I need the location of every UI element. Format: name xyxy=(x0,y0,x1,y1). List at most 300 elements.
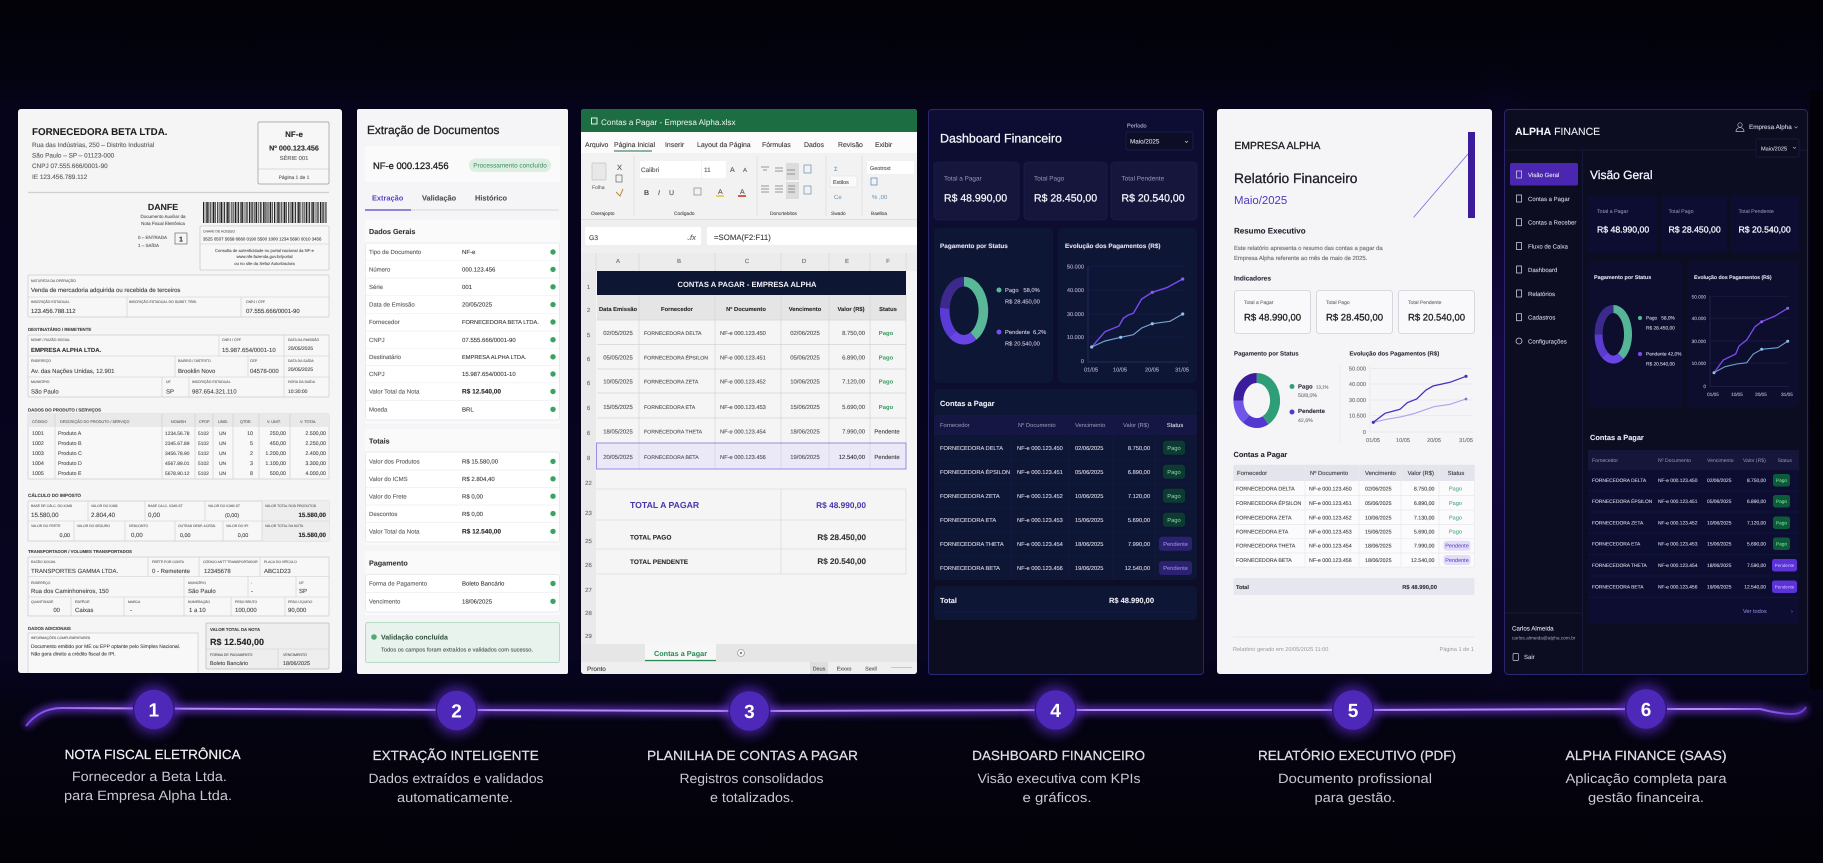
spreadsheet table: Vencimento xyxy=(789,306,822,313)
section: dados gerais: Data de Emissão xyxy=(369,302,415,309)
kpi cards: Total Pago xyxy=(1668,209,1694,215)
step 4 caption: e gráficos. xyxy=(1022,790,1092,805)
tabela de produtos: 2.400,00 xyxy=(305,451,326,457)
panel: planilha de contas a pagar xyxy=(581,109,917,674)
line chart: evolução dos pagamentos: 30.000 xyxy=(1067,312,1084,318)
report table: 18/06/2025 xyxy=(1365,544,1392,550)
section: dados gerais: Fornecedor xyxy=(369,319,400,326)
ribbon: Doncrtebitos xyxy=(770,211,798,217)
resumo executivo: Indicadores xyxy=(1234,276,1271,282)
grid headers: 29 xyxy=(585,633,592,640)
contas a pagar table: Pago xyxy=(1167,518,1181,524)
account menu: Empresa Alpha xyxy=(1749,124,1792,131)
tabela de produtos: Produto C xyxy=(58,451,82,457)
section: totais: Valor do Frete xyxy=(369,493,407,500)
cálculo do imposto xyxy=(28,492,329,541)
ribbon: % ,00 xyxy=(872,194,888,201)
spreadsheet table: 05/06/2025 xyxy=(790,354,820,362)
indicator cards: Total Pendente xyxy=(1408,300,1442,306)
transportador: SP xyxy=(299,588,307,595)
contas a pagar table: saas: FORNECEDORA ZETA xyxy=(1592,520,1644,526)
report table: Pago xyxy=(1449,501,1462,507)
destinatário block: DESTINATÁRIO / REMETENTE xyxy=(28,327,91,332)
report table: 8.750,00 xyxy=(1414,486,1435,492)
spreadsheet totals: TOTAL PAGO xyxy=(630,534,671,542)
spreadsheet table: FORNECEDORA ÉPSILON xyxy=(644,354,708,362)
tabela de produtos: 5678.90.12 xyxy=(165,471,190,477)
destinatário block: 20/05/2025 xyxy=(288,346,313,352)
section: dados gerais: 000.123.456 xyxy=(462,266,496,274)
menu: Dados xyxy=(804,142,824,149)
contas a pagar table: saas: NF-e 000.123.451 xyxy=(1658,499,1698,505)
valor total da nota: R$ 12.540,00 xyxy=(210,637,264,647)
contas a pagar table: Pendente xyxy=(1163,565,1188,572)
panel: extração de documentos xyxy=(357,109,568,674)
kpi cards: Total Pendente xyxy=(1122,176,1165,182)
report total xyxy=(1234,578,1474,595)
report table: Nº Documento xyxy=(1310,470,1349,477)
donut chart: pagamento por status: Pago 58,0% xyxy=(1005,287,1040,294)
kpi cards: R$ 20.540,00 xyxy=(1738,224,1791,234)
natureza da operação block: NATUREZA DA OPERAÇÃO xyxy=(31,278,76,283)
spreadsheet table: 20/05/2025 xyxy=(603,454,633,461)
contas a pagar table: saas: 6.890,00 xyxy=(1747,499,1766,505)
grid headers: E xyxy=(845,258,849,265)
section: totais: R$ 12.540,00 xyxy=(462,529,501,536)
donut chart: saas: Pagamento por Status xyxy=(1594,275,1651,281)
grid headers: 2 xyxy=(587,307,591,314)
report table: Vencimento xyxy=(1365,470,1397,477)
chave de acesso: www.nfe.fazenda.gov.br/portal xyxy=(236,254,293,259)
transportador: UF xyxy=(299,581,304,585)
grid headers: 6 xyxy=(587,405,591,412)
contas a pagar table: FORNECEDORA THETA xyxy=(940,542,1004,548)
tabela de produtos: UNID. xyxy=(218,420,228,424)
contas a pagar table: saas: 15/06/2025 xyxy=(1707,541,1732,547)
menu: Layout da Página xyxy=(697,141,751,149)
contas a pagar table: Pago xyxy=(1167,470,1181,476)
step 3 caption xyxy=(647,748,858,805)
grid headers: 6 xyxy=(587,430,591,437)
cálculo do imposto: BASE DE CÁLC. DO ICMS xyxy=(31,504,73,508)
line chart: report: 01/05 xyxy=(1366,437,1380,444)
spreadsheet table: Pago xyxy=(879,378,894,386)
cálculo do imposto: (0,00) xyxy=(225,513,239,519)
report table: 7.130,00 xyxy=(1414,515,1435,521)
destinatário block: Brooklin Novo xyxy=(178,368,216,375)
valor total da nota: FORMA DE PAGAMENTO xyxy=(210,653,253,657)
spreadsheet table: 8.750,00 xyxy=(842,330,866,337)
tabela de produtos: QTDE. xyxy=(240,420,252,424)
spreadsheet table: 05/05/2025 xyxy=(603,354,633,362)
contas a pagar table: Valor (R$) xyxy=(1123,422,1149,429)
section: totais xyxy=(365,429,560,545)
line chart: saas: 0 xyxy=(1703,384,1706,389)
cálculo do imposto: 0,00 xyxy=(148,512,161,519)
report table: NF-e 000.123.450 xyxy=(1309,486,1352,492)
barcode xyxy=(203,202,327,223)
kpi cards: Total a Pagar xyxy=(1597,209,1628,215)
step 3 caption: Registros consolidados xyxy=(680,771,824,786)
menu: Arquivo xyxy=(585,142,609,149)
tabela de produtos: DESCRIÇÃO DO PRODUTO / SERVIÇO xyxy=(60,419,130,424)
transportador: - xyxy=(251,581,252,585)
contas a pagar table: saas: 05/06/2025 xyxy=(1707,499,1732,505)
cálculo do imposto: DESCONTO xyxy=(129,524,149,528)
ribbon: U xyxy=(669,190,674,197)
destinatário block: EMPRESA ALPHA LTDA. xyxy=(31,347,102,354)
contas a pagar table: saas: 7.120,00 xyxy=(1747,520,1766,526)
contas a pagar table: 5.690,00 xyxy=(1128,518,1150,524)
line chart: report: 20/05 xyxy=(1427,437,1441,444)
grid headers xyxy=(581,253,917,644)
spreadsheet totals: TOTAL PENDENTE xyxy=(630,559,689,566)
step 4 caption xyxy=(972,748,1145,805)
contas a pagar table: FORNECEDORA ETA xyxy=(940,518,996,524)
danfe title: Nota Fiscal Eletrônica xyxy=(141,221,185,226)
total row: R$ 48.990,00 xyxy=(1109,596,1154,605)
section: pagamento: Vencimento xyxy=(369,598,401,606)
ribbon: Ce xyxy=(834,194,842,201)
report table: Pago xyxy=(1449,515,1462,521)
ribbon: B xyxy=(644,190,649,197)
donut chart: report: Pago xyxy=(1298,384,1313,390)
destinatário block xyxy=(28,327,329,397)
step 5 caption xyxy=(1258,748,1456,805)
step 6 caption: Aplicação completa para xyxy=(1566,771,1727,786)
section: dados gerais: Série xyxy=(369,284,384,291)
step 3 marker: 3 xyxy=(744,702,755,723)
step 5 caption: RELATÓRIO EXECUTIVO (PDF) xyxy=(1258,748,1456,763)
spreadsheet table: NF-e 000.123.456 xyxy=(720,455,766,461)
nf-e box xyxy=(258,122,329,184)
section: dados gerais: BRL xyxy=(462,406,474,413)
contas a pagar table: Nº Documento xyxy=(1018,422,1056,429)
report footer: Relatório gerado em 20/05/2025 11:00 xyxy=(1233,646,1328,653)
step 2 caption: automaticamente. xyxy=(397,790,513,805)
step 1 caption: Fornecedor a Beta Ltda. xyxy=(72,769,227,784)
contas a pagar table: 02/06/2025 xyxy=(1075,445,1103,452)
cálculo do imposto: 0,00 xyxy=(180,533,190,539)
section: totais: R$ 15.580,00 xyxy=(462,458,499,466)
report table: Pendente xyxy=(1445,544,1469,550)
transportador: ESPÉCIE xyxy=(75,600,90,604)
natureza da operação block: 123.456.788.112 xyxy=(31,308,76,315)
destinatário block: 10:30:00 xyxy=(288,389,308,395)
contas a pagar table: Status xyxy=(1167,422,1183,429)
dados adicionais: Não gera direito a crédito fiscal de IPI. xyxy=(31,652,116,658)
section: totais: R$ 2.804,40 xyxy=(462,476,495,483)
section: totais: Valor Total da Nota xyxy=(369,529,420,536)
contas a pagar table: FORNECEDORA ZETA xyxy=(940,494,1000,500)
valor total da nota xyxy=(206,623,329,669)
heading: fornecedora: CNPJ 07.555.666/0001-90 xyxy=(32,163,108,170)
report table: 18/06/2025 xyxy=(1365,558,1392,564)
donut chart: report: 50/8,0% xyxy=(1298,393,1317,399)
tabela de produtos: UN xyxy=(219,461,227,467)
tabs: Validação xyxy=(422,194,457,202)
contas a pagar table: 7.990,00 xyxy=(1128,542,1150,548)
transportador: 100,000 xyxy=(235,607,257,614)
formula bar: =SOMA(F2:F11) xyxy=(714,233,771,242)
report table: Pago xyxy=(1449,530,1462,536)
line chart: report: Evolução dos Pagamentos (R$) xyxy=(1350,350,1439,358)
period selector: Período xyxy=(1127,122,1147,130)
tabela de produtos: Produto B xyxy=(58,441,82,447)
report table: FORNECEDORA ETA xyxy=(1236,530,1289,536)
transportador: PLACA DO VEÍCULO xyxy=(264,560,297,564)
document id card: NF-e 000.123.456 xyxy=(373,160,449,171)
cálculo do imposto: 2.804,40 xyxy=(91,512,116,519)
report table: 5.690,00 xyxy=(1414,530,1435,536)
report table: NF-e 000.123.456 xyxy=(1309,558,1352,564)
step 6 caption: ALPHA FINANCE (SAAS) xyxy=(1566,748,1726,763)
section: dados gerais: 15.987.654/0001-10 xyxy=(462,371,516,378)
section: dados gerais xyxy=(365,220,560,424)
spreadsheet title row: CONTAS A PAGAR - EMPRESA ALPHA xyxy=(678,280,817,289)
ribbon: A xyxy=(740,189,745,196)
formula bar: fx xyxy=(690,233,696,242)
ribbon: Codigado xyxy=(674,211,695,217)
natureza da operação block: 07.555.666/0001-90 xyxy=(246,308,300,315)
line chart: saas: 10.000 xyxy=(1692,361,1706,366)
report table: 10/06/2025 xyxy=(1365,515,1392,521)
destinatário block: CNPJ / CPF xyxy=(222,338,241,342)
sidebar navigation: Fluxo de Caixa xyxy=(1528,243,1569,250)
tabela de produtos: 8 xyxy=(250,471,253,477)
grid headers: 1 xyxy=(587,284,591,291)
ribbon: Baelloa xyxy=(871,211,887,217)
tabela de produtos: 2.250,00 xyxy=(305,441,326,447)
document id card: Processamento concluído xyxy=(473,162,547,170)
menu: Exibir xyxy=(875,142,893,149)
danfe title: DANFE xyxy=(148,202,178,212)
section: dados gerais: Tipo de Documento xyxy=(369,249,422,256)
report table: FORNECEDORA DELTA xyxy=(1236,486,1295,492)
donut chart: saas: Pendente 42,0% xyxy=(1646,352,1682,358)
step 5 caption: Documento profissional xyxy=(1278,771,1432,786)
contas a pagar table: saas: Status xyxy=(1777,458,1792,464)
grid headers: C xyxy=(745,258,750,265)
tabela de produtos: 3.300,00 xyxy=(305,461,326,467)
contas a pagar table: saas: Valor (R$) xyxy=(1743,458,1766,464)
section: dados gerais: Valor Total da Nota xyxy=(369,389,420,396)
section: dados gerais: Número xyxy=(369,266,391,274)
natureza da operação block: INSCRIÇÃO ESTADUAL DO SUBST. TRIB. xyxy=(129,299,197,304)
line chart: evolução dos pagamentos: 50.000 xyxy=(1067,264,1084,270)
kpi cards xyxy=(1588,195,1799,253)
step 6 caption: gestão financeira. xyxy=(1588,790,1704,805)
tabela de produtos: CFOP xyxy=(199,420,210,424)
transportador: NUMERAÇÃO xyxy=(188,600,210,604)
line chart: report xyxy=(1340,350,1473,444)
title bar: Contas a Pagar - Empresa Alpha.xlsx xyxy=(601,118,736,127)
kpi cards: Total Pendente xyxy=(1738,209,1774,215)
formula bar: ⌄ xyxy=(686,236,691,242)
tabela de produtos: UN xyxy=(219,451,227,457)
heading: fornecedora xyxy=(32,127,168,181)
destinatário block: Av. das Nações Unidas, 12.901 xyxy=(31,368,115,375)
valor total da nota: 18/06/2025 xyxy=(283,661,310,667)
destinatário block: 987.654.321.110 xyxy=(192,388,237,396)
contas a pagar table: saas: Pago xyxy=(1776,499,1787,505)
user footer: Sair xyxy=(1524,654,1535,661)
tabela de produtos: 5102 xyxy=(198,441,209,447)
cálculo do imposto: VALOR DO IPI xyxy=(226,524,248,528)
donut chart: pagamento por status: Pendente 6,2% xyxy=(1005,329,1046,336)
spreadsheet table: 19/06/2025 xyxy=(790,454,820,461)
contas a pagar table: saas: Fornecedor xyxy=(1592,458,1618,464)
indicator cards: Total a Pagar xyxy=(1244,300,1274,306)
report total: Total xyxy=(1236,584,1249,591)
section: dados gerais: 001 xyxy=(462,284,473,291)
report table: FORNECEDORA ÉPSILON xyxy=(1236,500,1302,507)
contas a pagar table: saas: 18/06/2025 xyxy=(1707,563,1732,569)
step 1 caption: para Empresa Alpha Ltda. xyxy=(64,788,232,803)
cálculo do imposto: VALOR DO SEGURO xyxy=(77,524,110,528)
step 4 caption: Visão executiva com KPIs xyxy=(978,771,1141,786)
spreadsheet table: 12.540,00 xyxy=(839,454,866,461)
contas a pagar table: FORNECEDORA DELTA xyxy=(940,446,1003,452)
contas a pagar table: NF-e 000.123.452 xyxy=(1017,494,1063,500)
contas a pagar table: 8.750,00 xyxy=(1128,446,1150,452)
report total: R$ 48.990,00 xyxy=(1402,584,1437,591)
kpi cards: R$ 48.990,00 xyxy=(944,192,1007,204)
resumo executivo xyxy=(1234,226,1383,282)
sidebar navigation: Configurações xyxy=(1528,338,1567,345)
spreadsheet table: NF-e 000.123.450 xyxy=(720,331,766,337)
indicator cards: R$ 48.990,00 xyxy=(1244,312,1301,324)
transportador: 90,000 xyxy=(288,607,307,614)
section: dados gerais: Moeda xyxy=(369,406,388,413)
brand: ALPHA FINANCE xyxy=(1515,126,1600,138)
account menu xyxy=(1736,123,1799,157)
spreadsheet table: Pago xyxy=(879,404,894,411)
cálculo do imposto: VALOR DO FRETE xyxy=(31,524,61,528)
tabela de produtos: 2.500,00 xyxy=(305,431,326,437)
contas a pagar table: 10/06/2025 xyxy=(1075,493,1103,500)
timeline connector xyxy=(26,707,1806,726)
report table: NF-e 000.123.454 xyxy=(1309,544,1352,550)
destinatário block: São Paulo xyxy=(31,388,59,396)
chave de acesso: 3525 0507 5658 6660 0190 5500 1000 1234 5690 0010 3456 xyxy=(203,236,322,242)
ribbon xyxy=(581,153,917,220)
donut chart: report: Pagamento por Status xyxy=(1234,350,1299,358)
step 6 caption xyxy=(1566,748,1727,805)
indicator cards xyxy=(1234,290,1474,334)
sheet tabs xyxy=(581,644,917,662)
step 5 caption: para gestão. xyxy=(1314,790,1396,805)
tabela de produtos: 1.200,00 xyxy=(265,451,286,457)
line chart: saas: 30.000 xyxy=(1692,339,1706,344)
transportador: TRANSPORTES GAMMA LTDA. xyxy=(31,568,118,575)
natureza da operação block: CNPJ / CPF xyxy=(246,300,265,304)
line chart: saas: 10/05 xyxy=(1731,392,1743,397)
tabs xyxy=(365,194,559,210)
donut chart: saas: R$ 20.540,00 xyxy=(1646,362,1675,368)
spreadsheet totals: R$ 48.990,00 xyxy=(816,500,866,510)
grid headers: F xyxy=(886,258,890,265)
indicator cards: R$ 28.450,00 xyxy=(1326,312,1383,324)
spreadsheet table: Data Emissão xyxy=(599,306,637,313)
transportador: MUNICÍPIO xyxy=(188,581,206,585)
nf-e box: SÉRIE 001 xyxy=(280,154,308,162)
contas a pagar table: saas: 19/06/2025 xyxy=(1707,584,1732,590)
step 6 marker xyxy=(1622,685,1670,733)
formula bar xyxy=(581,220,917,253)
report table: NF-e 000.123.452 xyxy=(1309,515,1352,521)
tabs: Histórico xyxy=(475,194,508,202)
report footer: Página 1 de 1 xyxy=(1439,646,1474,653)
ribbon: A xyxy=(718,189,723,196)
status bar: Pronto xyxy=(587,666,606,673)
donut chart: report: 42,6% xyxy=(1298,418,1313,424)
panel: alpha finance saas xyxy=(1504,110,1808,675)
kpi cards: R$ 28.450,00 xyxy=(1668,224,1721,234)
line chart: saas: Evolução dos Pagamentos (R$) xyxy=(1694,275,1772,281)
spreadsheet table: Nº Documento xyxy=(726,306,766,313)
ribbon: Geotroxt xyxy=(870,166,891,172)
transportador: ENDEREÇO xyxy=(31,581,51,585)
contas a pagar table: saas: Pago xyxy=(1776,520,1787,526)
line chart: report: 10.500 xyxy=(1349,414,1366,420)
section: totais: Valor do ICMS xyxy=(369,476,408,483)
donut chart: pagamento por status: R$ 28.450,00 xyxy=(1005,298,1040,306)
user footer: carlos.almeida@alpha.com.br xyxy=(1512,636,1576,642)
ribbon: Σ xyxy=(834,166,838,173)
line chart: evolução dos pagamentos: 01/05 xyxy=(1084,366,1098,374)
section: dados gerais: NF-e xyxy=(462,249,476,256)
chave de acesso xyxy=(200,226,329,270)
cálculo do imposto: VALOR DO ICMS xyxy=(91,504,118,508)
tabela de produtos: 5102 xyxy=(198,461,209,467)
ribbon: Calibri xyxy=(641,167,659,174)
kpi cards: R$ 20.540,00 xyxy=(1122,192,1185,204)
contas a pagar table: saas xyxy=(1588,433,1799,624)
transportador: FRETE POR CONTA xyxy=(152,560,185,564)
spreadsheet table: Valor (R$) xyxy=(837,306,865,313)
report table: Valor (R$) xyxy=(1408,470,1434,477)
spreadsheet table: NF-e 000.123.454 xyxy=(720,430,766,436)
total row xyxy=(934,586,1197,620)
report table: NF-e 000.123.453 xyxy=(1309,530,1352,536)
contas a pagar table: Pago xyxy=(1167,494,1181,500)
spreadsheet table: FORNECEDORA BETA xyxy=(644,455,699,461)
destinatário block: CEP xyxy=(250,359,258,363)
tabela de produtos: 10 xyxy=(247,431,253,437)
grid headers: 22 xyxy=(585,480,592,487)
contas a pagar table: saas: FORNECEDORA THETA xyxy=(1592,563,1647,569)
tabela de produtos: 5102 xyxy=(198,431,209,437)
transportador: CÓDIGO ANTT TRANSPORTADOR xyxy=(203,560,258,564)
transportador: MARCA xyxy=(128,600,141,604)
destinatário block: DATA DA SAÍDA xyxy=(288,358,314,363)
status bar: Deus xyxy=(813,666,826,672)
step 2 caption xyxy=(368,748,544,805)
line chart: evolução dos pagamentos: 10.000 xyxy=(1067,335,1084,341)
section: dados gerais: CNPJ xyxy=(369,337,385,344)
section: dados gerais: FORNECEDORA BETA LTDA. xyxy=(462,320,539,326)
contas a pagar table: 6.890,00 xyxy=(1128,470,1150,476)
ribbon: Folha xyxy=(592,185,605,191)
transportador: - xyxy=(251,589,253,595)
contas a pagar table: saas: Ver todos xyxy=(1743,608,1767,615)
transportador: QUANTIDADE xyxy=(31,600,54,604)
section: pagamento xyxy=(365,551,560,615)
transportador: 12345678 xyxy=(204,568,231,575)
donut chart: pagamento por status: R$ 20.540,00 xyxy=(1005,340,1040,348)
tabela de produtos: 3 xyxy=(250,461,253,467)
